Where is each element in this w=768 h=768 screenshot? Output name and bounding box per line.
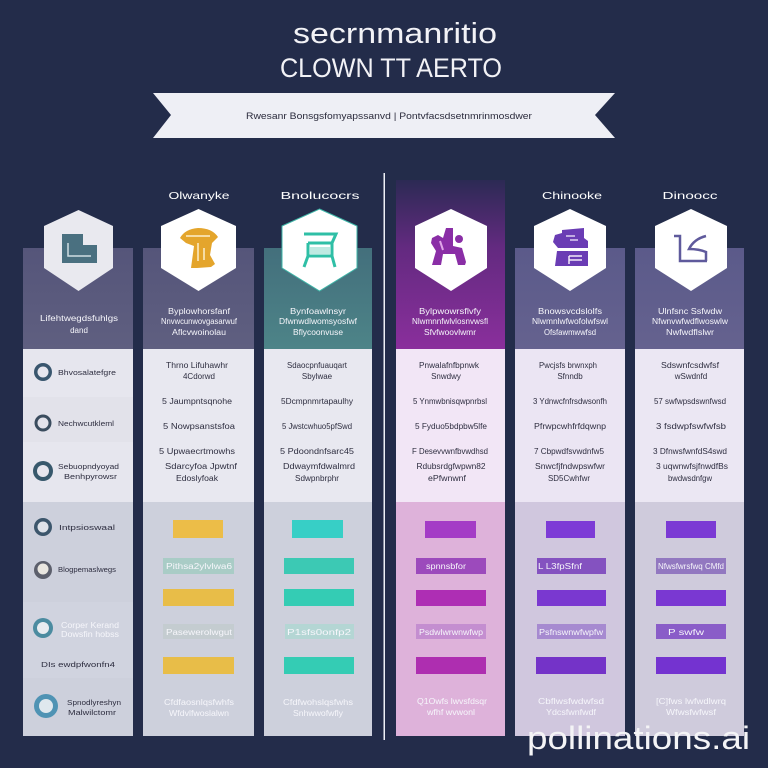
ribbon banner	[153, 93, 615, 138]
violet bars	[536, 521, 606, 674]
panel: column 2 yellow: 4Cdorwd	[183, 372, 215, 381]
panel: column 5 violet: Pwcjsfs brwnxph	[539, 361, 597, 370]
column headings: Dinoocc	[662, 190, 718, 202]
panel: column 6 violet: Nwfwdflslwr	[666, 328, 714, 337]
icon: column 5 hexagon	[534, 209, 606, 291]
panel: column 4 magenta: 5 Ynmwbnisqwpnrbsl	[413, 397, 487, 406]
title	[280, 18, 502, 83]
panel: column 6 violet: wSwdnfd	[674, 372, 707, 381]
panel: column 2 yellow	[143, 209, 254, 736]
panel: column 4 magenta: Sfvfwoovlwmr	[424, 328, 476, 337]
column headings: Chinooke	[542, 190, 602, 202]
row icon	[34, 518, 52, 536]
panel: column 2 yellow: Byplowhorsfanf	[168, 307, 231, 316]
violet bars	[656, 521, 726, 674]
panel: column 6 violet: bwdwsdnfgw	[668, 474, 712, 483]
column headings	[168, 190, 718, 202]
panel: column 2 yellow: Wfdvlfwoslalwn	[169, 709, 229, 718]
panel: column 1 row labels: Spnodlyreshyn	[67, 698, 121, 707]
panel: column 5 violet: Ydcsfwnfwdf	[546, 708, 597, 717]
row icon	[34, 694, 58, 718]
panel: column 5 violet: SD5Cwhfwr	[548, 474, 590, 483]
panel: column 2 yellow: 5 Jaumpntsqnohe	[162, 397, 233, 406]
panel: column 6 violet: 57 swfwpsdswnfwsd	[654, 397, 726, 406]
yellow bars	[163, 520, 234, 674]
row icon	[34, 561, 52, 579]
panel: column 1 row labels: Corper Kerand	[61, 621, 119, 630]
row icon	[33, 618, 53, 638]
panel: column 2 yellow: Sdarcyfoa Jpwtnf	[165, 462, 238, 471]
icon: column 1 hexagon	[44, 210, 113, 291]
panel: column 6 violet: Sdswnfcsdwfsf	[661, 361, 720, 370]
panel: column 1 row labels: dand	[70, 326, 88, 335]
panel: column 5 violet: Cbflwsfwdwfsd	[538, 697, 604, 706]
panel: column 4 magenta: wfhf wvwonl	[426, 708, 475, 717]
panel: column 2 yellow: Cfdfaosnlqsfwhfs	[164, 698, 234, 707]
panel: column 5 violet: Snwcfjfndwpswfwr	[535, 462, 605, 471]
panel: column 1 row labels: DIs ewdpfwonfn4	[41, 660, 115, 669]
magenta bars	[416, 521, 486, 674]
violet bars: Nfwsfwrsfwq CMfd	[658, 562, 724, 571]
panel: column 3 teal: Bynfoawlnsyr	[290, 307, 346, 316]
panel: column 6 violet: 3 uqwnwfsjfnwdfBs	[656, 462, 728, 471]
panel: column 6 violet: Ulnfsnc Ssfwdw	[658, 307, 722, 316]
row icon	[34, 414, 52, 432]
violet bars: L L3fpSfnf	[538, 562, 583, 571]
panel: column 3 teal: 5Dcmpnmrtapaulhy	[281, 397, 353, 406]
panel: column 6 violet: 3 fsdwpfswfwfsb	[656, 422, 727, 431]
panel: column 2 yellow: Thrno Lifuhawhr	[166, 361, 228, 370]
panel: column 2 yellow: Nnvwcunwovgasarwuf	[161, 317, 238, 326]
row icon	[33, 461, 53, 481]
panel: column 3 teal: Sbylwae	[302, 372, 333, 381]
watermark: pollinations.ai	[527, 720, 750, 756]
icon: column 2 hexagon	[161, 209, 236, 291]
panel: column 1 row labels	[23, 210, 133, 736]
panel: column 6 violet: Nfwnvwfwdflwoswlw	[652, 317, 728, 326]
magenta bars: Psdwlwrwnwfwp	[419, 628, 484, 637]
title: secrnmanritio	[293, 18, 497, 50]
teal bars	[284, 520, 354, 674]
panel: column 3 teal	[264, 209, 372, 736]
teal bars: P1sfs0onfp2	[287, 628, 352, 637]
panel: column 1 row labels: Benhpyrowsr	[64, 472, 118, 481]
panel: column 5 violet: 7 Cbpwdfsvwdnfw5	[534, 447, 605, 456]
violet bars: Psfnswnwfwpfw	[539, 628, 603, 637]
column headings: Oldwmio	[422, 190, 479, 202]
icon: column 4 hexagon	[415, 209, 487, 291]
panel: column 3 teal: Bflycoonvuse	[293, 328, 344, 337]
panel: column 1 row labels: Malwilctomr	[68, 708, 117, 717]
panel: column 3 teal: Cfdfwohslqsfwhs	[283, 698, 353, 707]
panel: column 1 row labels: Dowsfin hobss	[61, 630, 119, 639]
panel: column 3 teal: Ddwaymfdwalmrd	[283, 462, 355, 471]
center divider	[384, 173, 385, 740]
title: CLOWN TT AERTO	[280, 53, 502, 83]
panel: column 4 magenta: 5 Fyduo5bdpbw5lfe	[415, 422, 488, 431]
row icon	[34, 363, 52, 381]
panel: column 2 yellow: Aflcvwoinolau	[172, 328, 226, 337]
panel: column 1 row labels: Sebuopndyoyad	[58, 462, 119, 471]
panel: column 2 yellow: 5 Nowpsanstsfoa	[163, 422, 236, 431]
panel: column 6 violet: 3 DfnwsfwnfdS4swd	[653, 447, 727, 456]
panel: column 3 teal: Sdwpnbrphr	[295, 474, 339, 483]
panel: column 5 violet: Sfnndb	[557, 372, 583, 381]
panel: column 1 row labels: Intpsioswaal	[59, 523, 115, 532]
panel: column 1 row labels: Lifehtwegdsfuhlgs	[40, 314, 118, 323]
panel: column 3 teal: Sdaocpnfuauqart	[287, 361, 348, 370]
panel: column 4 magenta: Nlwmnnfwlvlosnvwsfl	[412, 317, 488, 326]
panel: column 6 violet: Wfwsfwfwsf	[666, 708, 717, 717]
yellow bars: Pithsa2ylvlwa6	[166, 562, 233, 571]
panel: column 4 magenta: ePfwnwnf	[428, 474, 467, 483]
icon: column 6 hexagon	[655, 209, 727, 291]
panel: column 4 magenta: Snwdwy	[431, 372, 461, 381]
ribbon banner: Rwesanr Bonsgsfomyapssanvd | Pontvfacsdsetnmrinmosdwer	[246, 111, 532, 122]
magenta bars: spnnsbfor	[426, 562, 466, 571]
panel: column 4 magenta: Rdubsrdgfwpwn82	[416, 462, 486, 471]
panel: column 4 magenta: Bylpwowrsflvfy	[419, 307, 481, 316]
icon: column 3 hexagon	[282, 209, 357, 291]
panel: column 4 magenta	[396, 180, 505, 736]
panel: column 1 row labels: Bhvosalatefgre	[58, 368, 116, 377]
panel: column 4 magenta: F Desevvwnfbvwdhsd	[412, 447, 488, 456]
column headings: Olwanyke	[168, 190, 230, 202]
panel: column 4 magenta: Q1Owfs lwvsfdsqr	[417, 697, 487, 706]
violet bars: P swfw	[668, 628, 704, 637]
panel: column 6 violet	[635, 209, 744, 736]
panel: column 3 teal: 5 Jwstcwhuo5pfSwd	[282, 422, 352, 431]
panel: column 5 violet: Pfrwpcwhfrfdqwnp	[534, 422, 607, 431]
panel: column 3 teal: 5 Pdoondnfsarc45	[280, 447, 355, 456]
panel: column 1 row labels: Blogpemaslwegs	[58, 565, 116, 574]
panel: column 4 magenta: Pnwalafnfbpnwk	[419, 361, 480, 370]
panel: column 5 violet: Nlwmnlwfwofolwfswl	[532, 317, 608, 326]
panel: column 5 violet: Bnowsvcdslolfs	[538, 307, 602, 316]
panel: column 5 violet: Ofsfawmwwfsd	[544, 328, 596, 337]
panel: column 1 row labels: Nechwcutkleml	[58, 419, 114, 428]
panel: column 3 teal: Snhwwofwfly	[293, 709, 343, 718]
column headings: Bnolucocrs	[280, 190, 360, 202]
panel: column 3 teal: Dfwnwdlwomsyosfwf	[279, 317, 358, 326]
panel: column 2 yellow: Edoslyfoak	[176, 474, 219, 483]
panel: column 2 yellow: 5 Upwaecrtmowhs	[159, 447, 235, 456]
panel: column 5 violet	[515, 209, 625, 736]
panel: column 6 violet: [C]fws lwfwdlwrq	[656, 697, 726, 706]
yellow bars: Pasewerolwgut	[166, 628, 233, 637]
panel: column 5 violet: 3 Ydnwcfnfrsdwsonfh	[533, 397, 607, 406]
